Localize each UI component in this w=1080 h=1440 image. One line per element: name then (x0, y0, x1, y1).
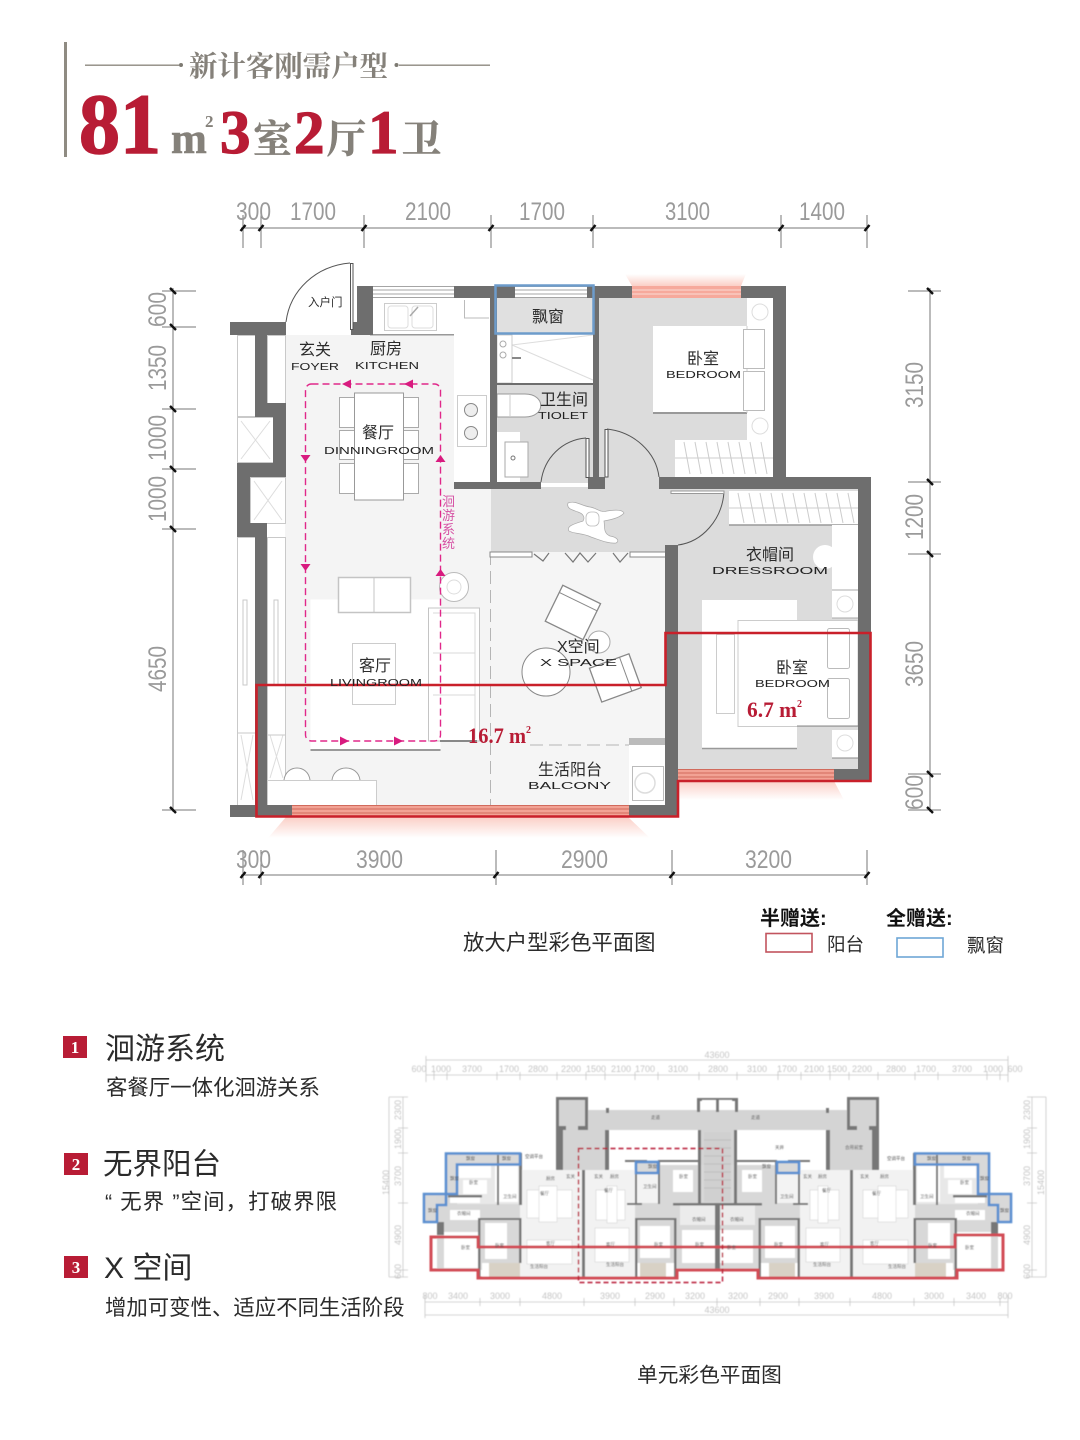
unit plan room labels: 客厅 (820, 1241, 829, 1248)
unit plan room labels: 客厅 (546, 1240, 555, 1247)
room labels: BEDROOM (666, 370, 741, 381)
unit plan dimensions: 43600 (704, 1305, 730, 1315)
left dimension line (144, 288, 196, 813)
unit plan dimensions: 3700 (952, 1064, 972, 1074)
unit plan room labels: 卫生间 (503, 1193, 517, 1200)
windows (292, 286, 834, 817)
right dimension line: 3650 (901, 641, 929, 687)
legend: half gift balcony: 阳台 (827, 934, 864, 955)
unit plan room labels: 玄关 (803, 1173, 812, 1180)
unit plan dimensions: 1900 (1022, 1129, 1032, 1149)
unit plan dimensions: 2300 (1022, 1100, 1032, 1120)
floor plan (230, 263, 871, 838)
header size and layout: 厅 (327, 119, 366, 162)
unit plan dimensions: 800 (422, 1291, 438, 1301)
unit plan room labels: 厨房 (610, 1173, 619, 1180)
balcony bench and chairs (268, 768, 376, 806)
left dimension line: 1350 (144, 345, 172, 391)
bathroom (497, 333, 594, 482)
unit plan room labels: 衣帽间 (966, 1210, 980, 1217)
header size and layout: 卫 (402, 119, 441, 162)
bottom dimension line: 3900 (356, 846, 403, 874)
unit plan dimensions: 2200 (561, 1064, 581, 1074)
unit plan room labels: 飘窗 (1000, 1207, 1009, 1214)
room labels: X空间 (557, 638, 600, 656)
living room furniture (310, 572, 480, 751)
unit plan left half shapes (424, 1097, 718, 1278)
unit plan balcony outline (431, 1235, 1003, 1278)
unit plan right half shapes (717, 1097, 1011, 1278)
unit plan room labels: 卧室 (654, 1241, 663, 1248)
dining table and chairs (340, 393, 418, 500)
area callout 6.7: 2 (797, 699, 802, 710)
unit plan dimensions: 600 (1022, 1264, 1032, 1279)
unit plan dimensions: 2800 (886, 1064, 906, 1074)
room labels (291, 295, 830, 792)
header size and layout: 3 (220, 100, 250, 167)
unit plan dimensions: 4800 (872, 1291, 892, 1301)
unit plan dimensions: 3900 (600, 1291, 620, 1301)
room labels: LIVINGROOM (330, 678, 422, 689)
unit plan room labels: 卫生间 (643, 1183, 657, 1190)
route label: 游 (442, 508, 455, 523)
unit plan (381, 1050, 1046, 1318)
unit plan room labels: 卧室 (960, 1179, 969, 1186)
unit plan selected unit box (578, 1148, 722, 1282)
dressroom and bedroom two furniture (702, 491, 858, 758)
unit plan room labels: 卧室 (695, 1241, 704, 1248)
floors (285, 298, 859, 810)
unit plan room labels: 卫生间 (780, 1193, 794, 1200)
plan caption: 放大户型彩色平面图 (463, 931, 656, 955)
unit plan room labels: 卧室 (928, 1242, 937, 1249)
legend: half gift balcony (760, 907, 864, 955)
unit plan room labels: 空调平台 (887, 1155, 905, 1162)
unit plan room labels: 走道 (651, 1114, 660, 1121)
unit plan dimensions: 2300 (393, 1100, 403, 1120)
room labels: 客厅 (359, 657, 391, 675)
feature 3: X 空间 (104, 1252, 192, 1285)
feature 2: 无界阳台 (103, 1148, 221, 1181)
unit plan room labels: 飘窗 (962, 1155, 971, 1162)
unit plan dimensions: 1000 (983, 1064, 1003, 1074)
legend: half gift balcony: 半赠送: (760, 907, 827, 930)
unit plan room labels: 餐厅 (540, 1190, 549, 1197)
unit plan dimensions: 15400 (1036, 1170, 1046, 1195)
unit plan room labels: 卧室 (965, 1244, 974, 1251)
top dimension line: 1400 (799, 198, 845, 226)
window glow (268, 274, 844, 838)
unit plan dimensions: 4900 (393, 1225, 403, 1245)
top dimension line: 1700 (519, 198, 565, 226)
unit plan room labels: 卧室 (727, 1244, 736, 1251)
unit plan room labels: 飘窗 (648, 1163, 657, 1170)
bottom dimension line: 2900 (561, 846, 608, 874)
header size and layout: 81 (79, 76, 161, 172)
left dimension line: 1000 (144, 415, 172, 461)
walls (230, 286, 871, 817)
unit plan dimensions: 1700 (916, 1064, 936, 1074)
unit plan caption: 单元彩色平面图 (637, 1364, 782, 1387)
unit plan room labels: 飘窗 (466, 1155, 475, 1162)
area callout 16.7: 2 (526, 725, 531, 736)
route label: 洄 (442, 494, 455, 509)
unit plan room labels: 卫生间 (920, 1193, 934, 1200)
unit plan dimensions: 1700 (635, 1064, 655, 1074)
kitchen (370, 298, 490, 483)
unit plan dimensions: 3700 (1022, 1166, 1032, 1186)
unit plan room labels: 飘窗 (927, 1155, 936, 1162)
feature 1: 洄游系统 (105, 1033, 225, 1066)
room labels: TIOLET (538, 411, 588, 422)
feature 2: “ 无界 ”空间，打破界限 (105, 1190, 337, 1214)
room labels: 厨房 (370, 340, 402, 358)
unit plan dimensions: 3400 (448, 1291, 468, 1301)
unit plan dimensions: 2100 (804, 1064, 824, 1074)
room labels: 卧室 (687, 350, 719, 368)
unit plan dimensions: 1500 (827, 1064, 847, 1074)
unit plan dimensions: 2800 (528, 1064, 548, 1074)
unit plan room labels: 玄关 (594, 1173, 603, 1180)
unit plan room labels: 天井 (775, 1144, 784, 1151)
unit plan room labels: 客厅 (870, 1240, 879, 1247)
unit plan dimensions: 3200 (685, 1291, 705, 1301)
legend: full gift bay window (886, 906, 1004, 957)
route label: 系 (442, 522, 455, 537)
unit plan room labels: 生活阳台 (888, 1263, 906, 1270)
top dimension line: 3100 (665, 198, 710, 226)
unit plan room labels: 飘窗 (762, 1163, 771, 1170)
unit plan dimensions: 1900 (393, 1129, 403, 1149)
unit plan dimensions: 1700 (499, 1064, 519, 1074)
unit plan dimensions: 3200 (728, 1291, 748, 1301)
unit plan room labels: 厨房 (546, 1175, 555, 1182)
feature 3: 增加可变性、适应不同生活阶段 (105, 1296, 404, 1320)
feature 2 (64, 1148, 337, 1214)
unit plan room labels: 飘窗 (502, 1155, 511, 1162)
unit plan room labels: 玄关 (860, 1173, 869, 1180)
unit plan room labels: 餐厅 (822, 1187, 831, 1194)
unit plan room labels: 厨房 (818, 1173, 827, 1180)
unit plan room labels: 客厅 (606, 1241, 615, 1248)
header size and layout: 2 (294, 100, 324, 167)
unit plan dimensions: 1700 (777, 1064, 797, 1074)
unit plan dimensions: 3100 (747, 1064, 767, 1074)
unit plan room labels (428, 1114, 1009, 1270)
room labels: BALCONY (528, 781, 612, 792)
right dimension line (901, 288, 941, 813)
header size and layout: 2 (205, 112, 214, 131)
unit plan dimensions: 3100 (668, 1064, 688, 1074)
legend: full gift bay window: 飘窗 (967, 935, 1004, 956)
header size and layout: 1 (368, 100, 398, 167)
unit plan room labels: 卧室 (469, 1179, 478, 1186)
right dimension line: 600 (901, 775, 929, 810)
route label: 统 (442, 536, 455, 551)
legend: full gift bay window: 全赠送: (886, 906, 953, 930)
unit plan room labels: 卧室 (679, 1173, 688, 1180)
header subtitle: 新计客刚需户型 (189, 50, 388, 83)
unit plan dimensions: 1500 (586, 1064, 606, 1074)
unit plan dimensions: 43600 (704, 1050, 730, 1060)
unit plan room labels: 衣帽间 (730, 1216, 744, 1223)
unit plan room labels: 走道 (751, 1114, 760, 1121)
unit plan room labels: 空调平台 (525, 1153, 543, 1160)
top dimension line: 2100 (405, 198, 451, 226)
unit plan dimensions: 2900 (645, 1291, 665, 1301)
area callout 16.7: 16.7 m (468, 723, 526, 748)
left dimension line: 4650 (144, 646, 172, 692)
room labels: KITCHEN (355, 361, 419, 372)
header size and layout: m (171, 116, 207, 163)
area callout 6.7: 6.7 m (747, 697, 797, 722)
room labels: 餐厅 (362, 424, 394, 442)
half-gift balcony outline (256, 633, 870, 816)
unit plan dimensions: 1000 (431, 1064, 451, 1074)
unit plan room labels: 卧室 (495, 1242, 504, 1249)
right dimension line: 1200 (901, 494, 929, 540)
room labels: X SPACE (540, 658, 618, 669)
unit plan dimensions: 3700 (462, 1064, 482, 1074)
unit plan dimensions: 600 (393, 1264, 403, 1279)
room labels: BEDROOM (755, 679, 830, 690)
unit plan dimensions: 2800 (708, 1064, 728, 1074)
bay window highlight (496, 286, 594, 334)
washing machine (629, 738, 666, 805)
room labels: 飘窗 (532, 308, 564, 326)
feature 1 (63, 1033, 320, 1100)
unit plan dimensions: 2100 (611, 1064, 631, 1074)
unit plan dimensions: 3400 (966, 1291, 986, 1301)
feature 1: 1 (71, 1038, 79, 1057)
unit plan dimensions: 3900 (814, 1291, 834, 1301)
unit plan room labels: 卧室 (774, 1241, 783, 1248)
left dimension line: 1000 (144, 476, 172, 522)
doors (286, 263, 724, 545)
unit plan dimensions: 2200 (852, 1064, 872, 1074)
feature 3: 3 (72, 1258, 80, 1277)
feature 2: 2 (72, 1155, 80, 1174)
unit plan room labels: 玄关 (566, 1173, 575, 1180)
header block (64, 42, 490, 172)
room labels: DRESSROOM (712, 566, 828, 577)
unit plan room labels: 衣帽间 (692, 1216, 706, 1223)
unit plan room labels: 厨房 (880, 1173, 889, 1180)
room labels: 卫生间 (540, 391, 588, 409)
unit plan room labels: 生活阳台 (606, 1261, 624, 1268)
bottom dimension line: 300 (236, 846, 271, 874)
unit plan dimensions: 600 (1007, 1064, 1023, 1074)
unit plan dimensions: 3000 (490, 1291, 510, 1301)
route label (442, 494, 455, 551)
left dimension line: 600 (144, 292, 172, 327)
header size and layout: 室 (253, 119, 292, 162)
unit plan room labels: 飘窗 (450, 1175, 459, 1182)
person figure (568, 502, 624, 543)
bottom dimension line: 3200 (745, 846, 792, 874)
top dimension line: 300 (236, 198, 271, 226)
unit plan room labels: 合用前室 (845, 1144, 863, 1151)
header size and layout (79, 76, 441, 172)
unit plan dimensions: 3000 (924, 1291, 944, 1301)
closets left (237, 336, 286, 806)
unit plan room labels: 飘窗 (980, 1175, 989, 1182)
unit plan dimensions: 800 (997, 1291, 1013, 1301)
right dimension line: 3150 (901, 362, 929, 408)
unit plan dimensions: 15400 (381, 1170, 391, 1195)
x space furniture (490, 552, 666, 805)
unit plan dimensions: 600 (411, 1064, 427, 1074)
unit plan room labels: 生活阳台 (530, 1263, 548, 1270)
bottom dimension line (236, 846, 870, 885)
room labels: FOYER (291, 362, 339, 373)
unit plan stair and center rooms (702, 1098, 732, 1202)
unit plan room labels: 卧室 (461, 1244, 470, 1251)
room labels: 玄关 (299, 341, 331, 359)
unit plan room labels: 餐厅 (872, 1190, 881, 1197)
unit plan room labels: 生活阳台 (813, 1261, 831, 1268)
unit plan dimensions: 4800 (542, 1291, 562, 1301)
feature 1: 客餐厅一体化洄游关系 (106, 1076, 320, 1100)
unit plan dimensions: 2900 (768, 1291, 788, 1301)
unit plan room labels: 飘窗 (428, 1207, 437, 1214)
unit plan room labels: 餐厅 (604, 1187, 613, 1194)
unit plan dimensions: 4900 (1022, 1225, 1032, 1245)
room labels: 入户门 (308, 295, 342, 309)
top dimension line (236, 198, 870, 248)
circulation route (300, 380, 446, 746)
bedroom one furniture (653, 298, 773, 477)
feature 3 (64, 1252, 404, 1320)
unit plan room labels: 卧室 (748, 1173, 757, 1180)
room labels: 生活阳台 (538, 761, 602, 779)
top dimension line: 1700 (290, 198, 336, 226)
unit plan dimensions: 3700 (393, 1166, 403, 1186)
unit plan room labels: 衣帽间 (457, 1210, 471, 1217)
unit plan dimensions (381, 1050, 1046, 1318)
room labels: 衣帽间 (746, 546, 794, 564)
room labels: DINNINGROOM (324, 446, 434, 457)
room labels: 卧室 (776, 659, 808, 677)
